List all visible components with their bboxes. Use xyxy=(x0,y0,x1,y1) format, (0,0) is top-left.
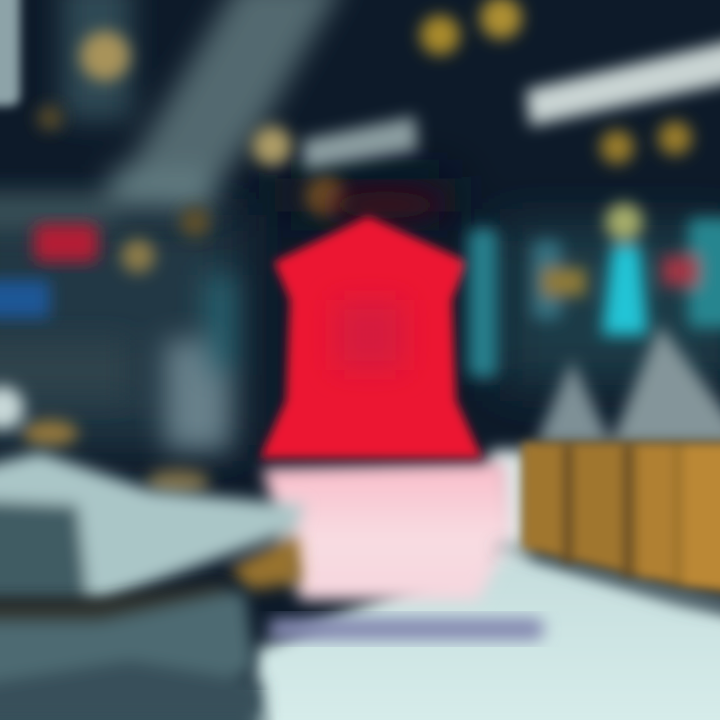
gold coins xyxy=(37,0,692,273)
grey coin stacks above crates xyxy=(535,325,720,445)
coins on left ledge xyxy=(0,386,210,495)
grey label centre xyxy=(302,116,418,170)
red sign left xyxy=(34,224,98,262)
bank inner shading xyxy=(335,300,405,370)
teal bottles and charts right xyxy=(468,203,720,378)
wooden crates xyxy=(522,442,720,596)
red bank building xyxy=(260,216,482,458)
stack of books bottom left xyxy=(0,452,305,720)
top left panel xyxy=(0,0,20,106)
floor xyxy=(255,450,720,720)
purple floor stripe xyxy=(268,618,544,640)
blue sign left xyxy=(0,280,50,318)
dark red glow above bank xyxy=(325,191,445,219)
upper left machinery xyxy=(0,0,345,450)
crate shadow xyxy=(490,545,720,618)
pink area beneath bank xyxy=(262,462,512,600)
white label right xyxy=(526,36,720,126)
